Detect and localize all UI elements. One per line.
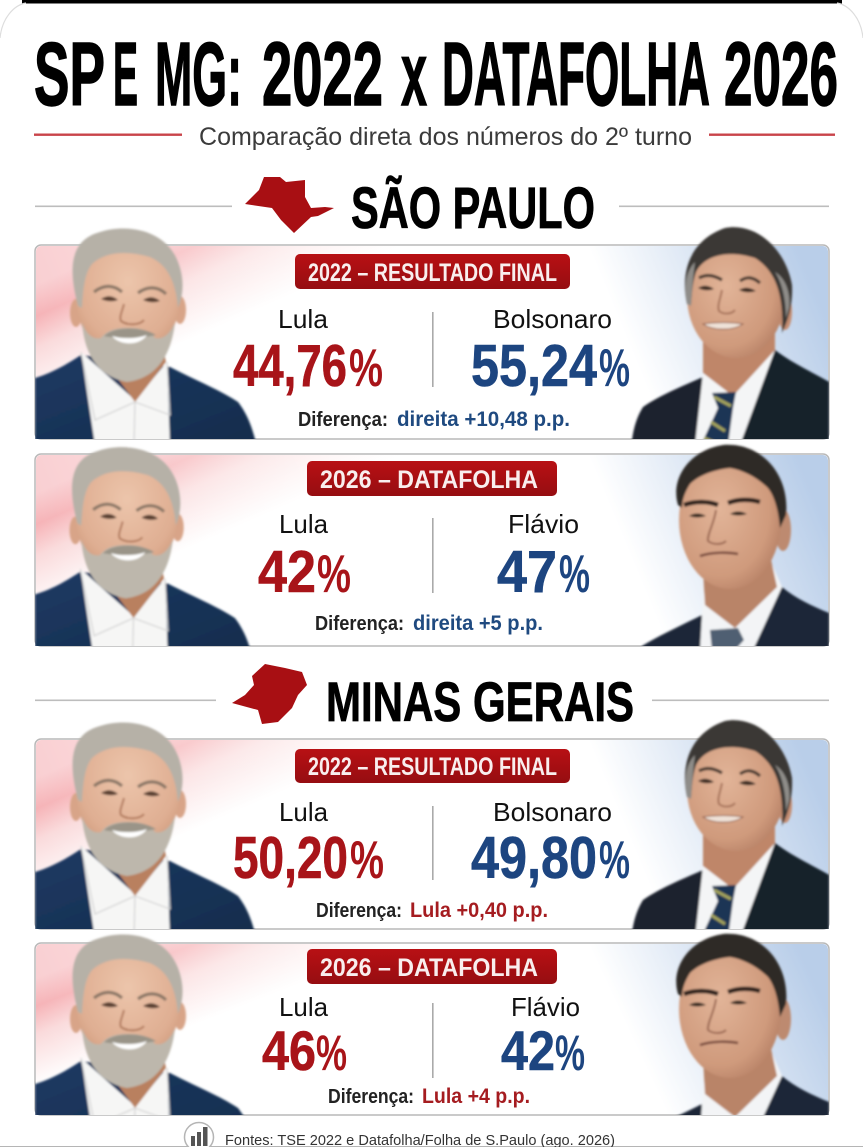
portrait: Bolsonaro	[632, 720, 829, 938]
Flávio result	[501, 992, 585, 1082]
portrait: Lula	[35, 933, 245, 1115]
difference	[328, 1085, 530, 1108]
badge: 2022 resultado final: 2022 – RESULTADO FINAL	[308, 259, 557, 287]
portrait: Flávio	[642, 445, 829, 650]
badge: 2026 Datafolha: 2026 – DATAFOLHA	[320, 466, 538, 494]
difference: direita +5 p.p.	[413, 612, 543, 635]
Flávio result: Flávio	[511, 992, 580, 1022]
Lula result	[233, 304, 383, 399]
Flávio result: 42	[501, 1019, 555, 1082]
Lula result: Lula	[278, 304, 329, 334]
difference: Lula +0,40 p.p.	[410, 899, 548, 922]
title: 2022	[262, 25, 383, 125]
difference: Diferença:	[298, 409, 388, 431]
source footer	[184, 1122, 615, 1147]
Flávio result: 47	[497, 539, 557, 605]
portrait: Flávio	[674, 932, 829, 1115]
title: x	[401, 25, 427, 125]
Lula result: %	[316, 1025, 347, 1081]
Bolsonaro result: %	[599, 339, 630, 398]
portrait: Lula	[35, 447, 252, 660]
Bolsonaro result: 49,80	[471, 825, 597, 891]
subtitle: Comparação direta dos números do 2º turno	[199, 123, 692, 151]
title: E	[113, 25, 138, 125]
difference: Diferença:	[315, 613, 404, 635]
Lula result	[233, 797, 384, 891]
panel: Minas Gerais 2026	[34, 932, 830, 1116]
panel: São Paulo 2022	[35, 227, 829, 445]
badge: 2022 resultado final	[295, 749, 570, 783]
section heading: São Paulo: SÃO PAULO	[351, 176, 595, 241]
Bolsonaro result	[471, 304, 630, 399]
Lula result: 44,76	[233, 333, 347, 399]
Lula result: %	[349, 339, 383, 398]
Lula result: 46	[262, 1019, 316, 1082]
portrait: Bolsonaro	[632, 227, 829, 445]
title: MG:	[155, 25, 242, 125]
section heading: Minas Gerais: MINAS GERAIS	[326, 670, 634, 733]
Lula result: 50,20	[233, 825, 348, 891]
Bolsonaro result	[471, 797, 630, 891]
badge: 2022 resultado final: 2022 – RESULTADO FINAL	[308, 753, 557, 781]
Bolsonaro result: 55,24	[471, 333, 597, 399]
Lula result	[258, 509, 351, 605]
section heading: São Paulo	[35, 176, 829, 241]
difference: direita +10,48 p.p.	[397, 408, 570, 431]
Flávio result: Flávio	[508, 509, 579, 539]
badge: 2026 Datafolha: 2026 – DATAFOLHA	[320, 954, 538, 982]
Lula result: Lula	[279, 509, 329, 539]
panel: São Paulo 2026	[35, 445, 829, 660]
section heading: Minas Gerais	[35, 664, 829, 733]
title	[34, 25, 838, 125]
Flávio result	[497, 509, 590, 605]
difference	[315, 612, 543, 635]
title: SP	[34, 25, 105, 125]
difference	[316, 899, 548, 922]
difference	[298, 408, 570, 431]
Bolsonaro result: Bolsonaro	[493, 304, 612, 334]
Flávio result: %	[559, 545, 590, 604]
Bolsonaro result: Bolsonaro	[493, 797, 612, 827]
Lula result: 42	[258, 539, 316, 605]
panel: Minas Gerais 2022	[35, 720, 829, 939]
difference: Diferença:	[328, 1086, 414, 1108]
difference: Diferença:	[316, 900, 402, 922]
badge: 2022 resultado final	[295, 254, 570, 289]
portrait: Lula	[35, 722, 255, 939]
icon: Minas Gerais state map	[232, 664, 307, 724]
icon: bar chart	[184, 1122, 214, 1147]
portrait: Lula	[35, 228, 255, 445]
Lula result: %	[317, 545, 351, 604]
Lula result	[262, 992, 347, 1082]
Flávio result: %	[555, 1025, 585, 1081]
icon: São Paulo state map	[245, 177, 334, 233]
Lula result: Lula	[279, 992, 329, 1022]
difference: Lula +4 p.p.	[422, 1085, 530, 1108]
Lula result: Lula	[279, 797, 329, 827]
Lula result: %	[350, 831, 384, 890]
Bolsonaro result: %	[599, 831, 630, 890]
